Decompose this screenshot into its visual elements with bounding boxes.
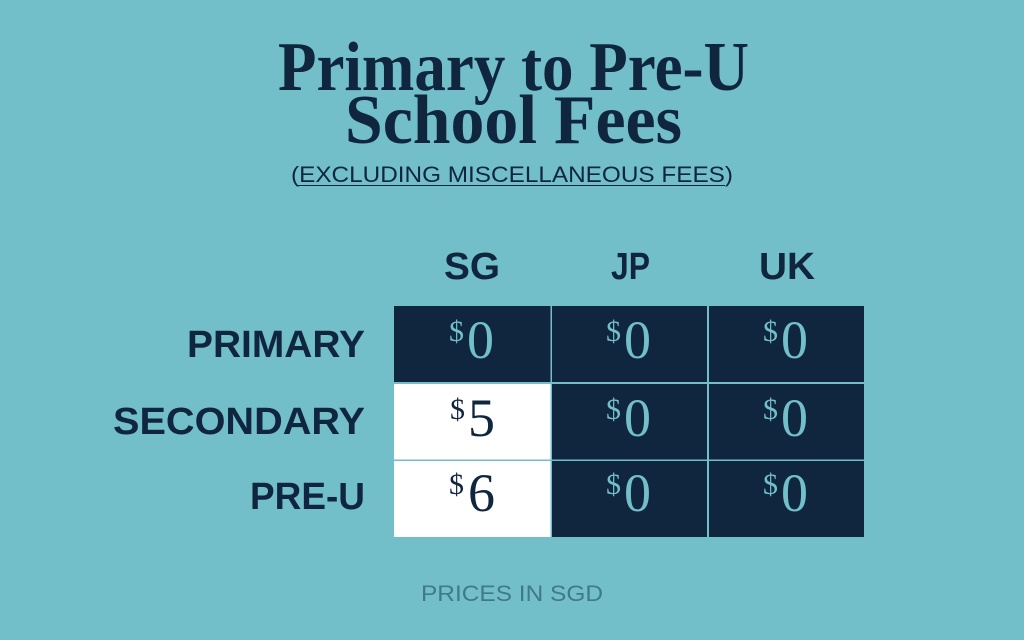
row: pre-u: $ (763, 468, 778, 501)
row labels: PRIMARY (187, 324, 365, 366)
column headers: UK (759, 246, 816, 288)
row labels: PRE-U (250, 476, 365, 518)
column headers (444, 246, 816, 288)
fee table (394, 306, 864, 537)
row: secondary: $ (450, 393, 465, 426)
row: primary: 0 (781, 310, 808, 370)
row: primary: 0 (624, 310, 651, 370)
row: primary: $ (449, 315, 464, 348)
title: Primary to Pre-U (278, 29, 749, 106)
row: secondary (394, 384, 864, 460)
row: primary: $ (606, 315, 621, 348)
title (278, 29, 749, 159)
row: pre-u: 0 (781, 463, 808, 523)
subtitle: (EXCLUDING MISCELLANEOUS FEES) (291, 162, 733, 187)
row: pre-u (394, 461, 864, 537)
row: pre-u: $ (449, 468, 464, 501)
row labels: SECONDARY (113, 401, 365, 443)
row: primary: 0 (467, 310, 494, 370)
row: pre-u: 6 (468, 463, 495, 523)
row: secondary: 0 (624, 388, 651, 448)
row: secondary: 5 (468, 388, 495, 448)
row: secondary: $ (763, 393, 778, 426)
row: pre-u: 0 (624, 463, 651, 523)
column headers: JP (611, 246, 650, 288)
footnote: PRICES IN SGD (421, 581, 603, 606)
row: secondary: $ (606, 393, 621, 426)
row labels (113, 324, 365, 518)
row: primary (394, 306, 864, 382)
row: primary: $ (763, 315, 778, 348)
title: School Fees (345, 82, 682, 159)
row: secondary: 0 (781, 388, 808, 448)
column headers: SG (444, 246, 500, 288)
row: pre-u: $ (606, 468, 621, 501)
